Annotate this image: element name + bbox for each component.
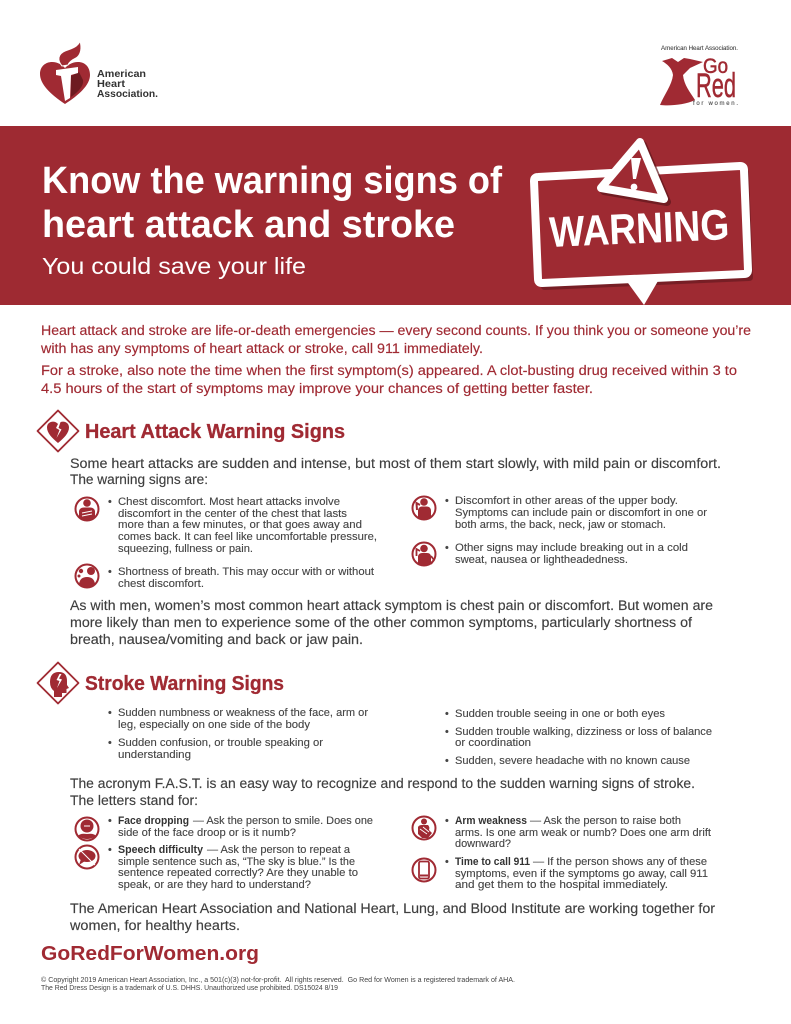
stroke signs: right column: • — [445, 755, 449, 767]
title — [42, 160, 502, 246]
logo: Go Red for Women — [660, 46, 738, 107]
logo: American Heart Association: American — [97, 69, 146, 80]
icon: stroke diamond — [38, 662, 78, 704]
paragraph: women's symptoms: more likely than men to experience some of the other common symptoms, particularly shortness of — [70, 615, 692, 630]
title: heart attack and stroke — [42, 204, 455, 246]
bullet: upper body discomfort: Discomfort in other areas of the upper body. — [455, 495, 678, 507]
bullet: face dropping: • — [108, 815, 112, 827]
intro text: Heart attack and stroke are life-or-death emergencies — every second counts. If you think you or someone you’re — [41, 323, 751, 338]
bullet: shortness of breath — [108, 566, 374, 590]
stroke signs: right column: or coordination — [455, 737, 531, 749]
stroke signs: left column: leg, especially on one side of the body — [118, 719, 311, 731]
icon: arm weakness — [412, 816, 436, 840]
icon: heart attack diamond — [38, 410, 78, 452]
bullet: arm weakness: downward? — [455, 838, 511, 850]
icon: phone — [412, 858, 436, 882]
bullet: upper body discomfort: • — [445, 495, 449, 507]
website link: GoRedForWomen.org — [41, 942, 259, 965]
stroke signs: right column — [445, 708, 712, 767]
icon: face dropping — [76, 818, 98, 840]
bullet: speech difficulty: speak, or are they hard to understand? — [118, 879, 311, 891]
bullet: face dropping: side of the face droop or is it numb? — [118, 827, 296, 839]
stroke signs: left column: • — [108, 707, 112, 719]
banner — [0, 126, 791, 305]
logo: American Heart Association — [40, 41, 158, 104]
bullet: upper body discomfort: Symptoms can include pain or discomfort in one or — [455, 507, 707, 519]
paragraph: F.A.S.T.: The acronym F.A.S.T. is an easy way to recognize and respond to the sudden warning signs of stroke. — [70, 776, 695, 791]
stroke signs: right column: • — [445, 726, 449, 738]
heading: heart attack warning signs: Heart Attack Warning Signs — [85, 421, 345, 443]
bullet: upper body discomfort: both arms, the back, neck, jaw or stomach. — [455, 519, 666, 531]
logo: Go Red for Women: Go — [703, 55, 728, 78]
heart attack intro — [70, 456, 721, 487]
logo: American Heart Association: Heart — [97, 79, 126, 90]
bullet: speech difficulty: Speech difficulty — [118, 844, 203, 856]
bullet: face dropping: — Ask the person to smile. Does one — [193, 815, 373, 827]
icon: upper body discomfort — [412, 496, 436, 520]
stroke signs: left column: understanding — [118, 749, 191, 761]
bullet: time to call 911 — [445, 856, 708, 891]
copyright footer: © Copyright 2019 American Heart Association, Inc., a 501(c)(3) not-for-profit. All rights reserved. Go Red for Women is a registered trademark of AHA. — [41, 976, 515, 984]
heading: stroke warning signs: Stroke Warning Signs — [85, 673, 284, 695]
stroke signs: left column: Sudden numbness or weakness of the face, arm or — [118, 707, 368, 719]
closing paragraph: women, for healthy hearts. — [69, 918, 240, 933]
logo: Go Red for Women: Red — [696, 67, 736, 105]
bullet: time to call 911: • — [445, 856, 449, 868]
intro text: For a stroke, also note the time when the first symptom(s) appeared. A clot-busting drug received within 3 to — [41, 363, 737, 378]
bullet: chest discomfort: more than a few minutes, or that goes away and — [118, 519, 362, 531]
icon: chest discomfort — [76, 498, 98, 520]
icon: warning sign: WARNING — [548, 201, 730, 257]
intro text: 4.5 hours of the start of symptoms may improve your chances of getting better faster. — [41, 381, 593, 396]
bullet: shortness of breath: chest discomfort. — [118, 578, 204, 590]
bullet: shortness of breath: Shortness of breath. This may occur with or without — [118, 566, 374, 578]
icon: shortness of breath — [76, 564, 98, 588]
bullet: time to call 911: — If the person shows any of these — [533, 856, 707, 868]
intro text: with has any symptoms of heart attack or stroke, call 911 immediately. — [40, 341, 483, 356]
bullet: arm weakness: • — [445, 815, 449, 827]
heart attack intro: The warning signs are: — [70, 472, 208, 487]
logo: American Heart Association: Association. — [97, 89, 158, 100]
paragraph: F.A.S.T. — [70, 776, 695, 808]
bullet: other signs: Other signs may include breaking out in a cold — [455, 542, 688, 554]
bullet: time to call 911: and get them to the hospital immediately. — [455, 879, 668, 891]
bullet: shortness of breath: • — [108, 566, 112, 578]
bullet: face dropping: Face dropping — [118, 815, 189, 827]
subtitle: You could save your life — [42, 253, 306, 279]
logo: Go Red for Women: for women. — [693, 101, 738, 107]
icon: warning sign — [534, 142, 753, 305]
stroke signs: right column: Sudden, severe headache with no known cause — [455, 755, 690, 767]
bullet: chest discomfort: discomfort in the center of the chest that lasts — [118, 508, 348, 520]
bullet: chest discomfort: comes back. It can feel like uncomfortable pressure, — [118, 531, 377, 543]
stroke signs: left column: • — [108, 737, 112, 749]
bullet: chest discomfort: Chest discomfort. Most heart attacks involve — [118, 496, 340, 508]
bullet: chest discomfort — [108, 496, 377, 555]
bullet: other signs: sweat, nausea or lightheadedness. — [455, 554, 628, 566]
bullet: speech difficulty — [108, 844, 358, 891]
bullet: speech difficulty: • — [108, 844, 112, 856]
bullet: arm weakness: — Ask the person to raise both — [530, 815, 681, 827]
paragraph: women's symptoms: breath, nausea/vomiting and back or jaw pain. — [70, 632, 363, 647]
bullet: other signs: • — [445, 542, 449, 554]
paragraph: women's symptoms: As with men, women’s most common heart attack symptom is chest pain or discomfort. But women are — [70, 598, 713, 613]
bullet: speech difficulty: sentence repeated correctly? Are they unable to — [118, 867, 358, 879]
stroke signs: right column: Sudden trouble seeing in one or both eyes — [455, 708, 666, 720]
bullet: arm weakness: arms. Is one arm weak or numb? Does one arm drift — [455, 827, 711, 839]
bullet: arm weakness: Arm weakness — [455, 815, 527, 827]
bullet: chest discomfort: • — [108, 496, 112, 508]
copyright footer: The Red Dress Design is a trademark of U.S. DHHS. Unauthorized use prohibited. DS15024 8/19 — [41, 985, 338, 992]
bullet: time to call 911: symptoms, even if the symptoms go away, call 911 — [455, 868, 708, 880]
closing paragraph: The American Heart Association and National Heart, Lung, and Blood Institute are working together for — [70, 901, 716, 916]
icon: other signs — [412, 542, 436, 566]
paragraph: women's symptoms — [70, 598, 713, 647]
bullet: speech difficulty: simple sentence such as, “The sky is blue.” Is the — [118, 856, 355, 868]
intro text — [40, 323, 751, 396]
stroke signs: left column: Sudden confusion, or trouble speaking or — [118, 737, 323, 749]
paragraph: F.A.S.T.: The letters stand for: — [70, 793, 198, 808]
bullet: chest discomfort: squeezing, fullness or pain. — [118, 543, 253, 555]
bullet: time to call 911: Time to call 911 — [455, 856, 530, 868]
heart attack intro: Some heart attacks are sudden and intense, but most of them start slowly, with mild pain or discomfort. — [70, 456, 721, 471]
bullet: speech difficulty: — Ask the person to repeat a — [207, 844, 350, 856]
bullet: upper body discomfort — [445, 495, 707, 531]
title: Know the warning signs of — [42, 160, 502, 202]
closing paragraph — [69, 901, 716, 933]
bullet: face dropping — [108, 815, 373, 839]
bullet: other signs — [445, 542, 688, 566]
icon: speech difficulty — [76, 846, 98, 868]
stroke signs: right column: Sudden trouble walking, dizziness or loss of balance — [455, 726, 712, 738]
logo: Go Red for Women: American Heart Association. — [661, 46, 738, 52]
stroke signs: left column — [108, 707, 368, 761]
bullet: arm weakness — [445, 815, 711, 850]
stroke signs: right column: • — [445, 708, 449, 720]
copyright footer — [41, 976, 515, 992]
